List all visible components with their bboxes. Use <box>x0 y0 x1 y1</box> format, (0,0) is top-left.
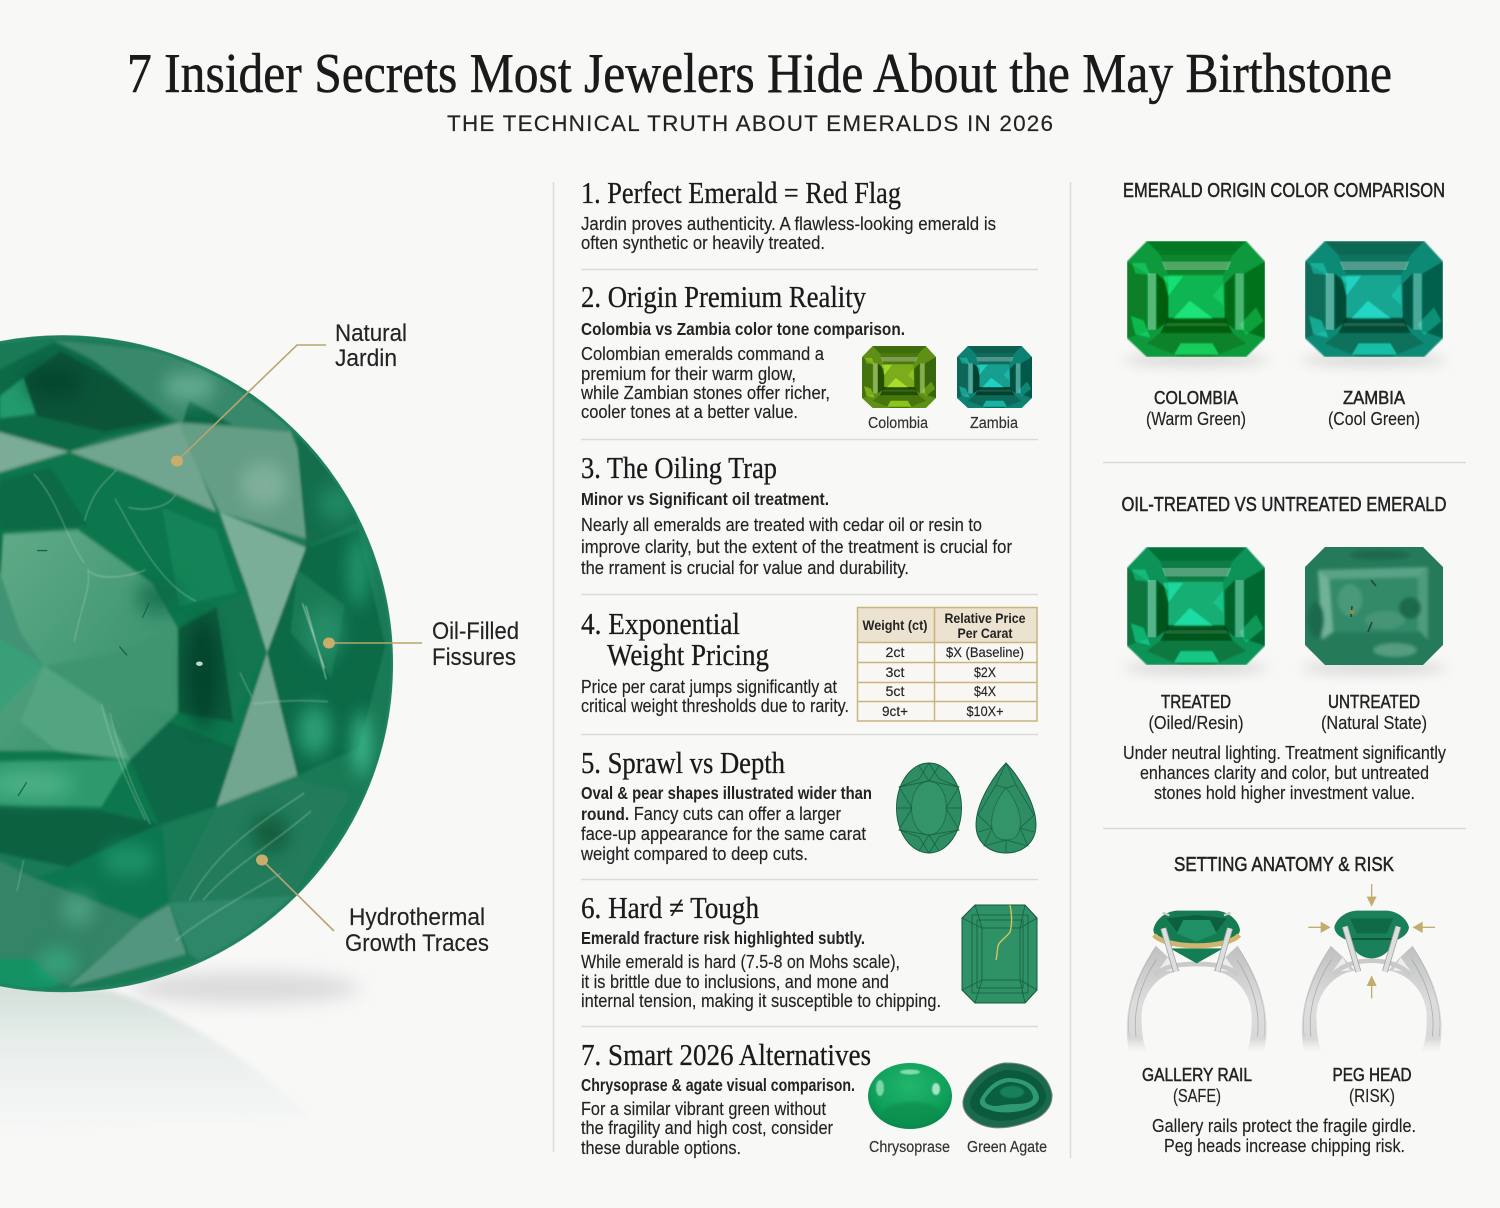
text: setting note: Peg heads increase chipping risk. <box>1164 1135 1405 1156</box>
icon: emerald cut with fracture line <box>962 905 1037 1003</box>
inclusions <box>17 470 328 940</box>
table: relative price per carat: 3ct <box>886 664 905 680</box>
label: peg head <box>1332 1064 1412 1106</box>
text: secret 3 body <box>581 514 1012 578</box>
table: relative price per carat: $2X <box>974 664 997 680</box>
text: secret 2 body: Colombian emeralds command a <box>581 343 825 364</box>
table: relative price per carat: Per Carat <box>958 625 1013 641</box>
caption: Chrysoprase: Chrysoprase <box>869 1139 950 1156</box>
text: secret 6 subhead: Emerald fracture risk highlighted subtly. <box>581 928 865 948</box>
callout: Oil-Filled Fissures <box>323 618 519 671</box>
text: secret 7 body: the fragility and high cost, consider <box>581 1117 833 1138</box>
icon: chrysoprase stone <box>868 1063 952 1129</box>
subtitle: THE TECHNICAL TRUTH ABOUT EMERALDS IN 2026 <box>447 111 1053 136</box>
label: gallery rail: (SAFE) <box>1173 1085 1221 1106</box>
table: relative price per carat: 9ct+ <box>882 703 908 719</box>
text: secret 7 body <box>581 1098 833 1158</box>
text: secret 4 body: critical weight thresholds due to rarity. <box>581 695 849 716</box>
text: secret 5 body: face-up appearance for the same carat <box>581 823 866 844</box>
label: Zambia: (Cool Green) <box>1328 408 1420 429</box>
callout: Oil-Filled Fissures: Oil-Filled <box>432 618 519 645</box>
heading: secret 1: 1. Perfect Emerald = Red Flag <box>581 175 901 210</box>
text: secret 1 body: Jardin proves authenticity. A flawless-looking emerald is <box>581 213 996 234</box>
text: secret 2 body: cooler tones at a better value. <box>581 401 798 422</box>
label: Zambia: ZAMBIA <box>1343 387 1406 408</box>
table: relative price per carat <box>857 607 1037 721</box>
label: treated: TREATED <box>1161 691 1231 712</box>
gem: Zambia <box>1302 241 1446 366</box>
label: treated: (Oiled/Resin) <box>1148 712 1244 733</box>
text: secret 3 body: the rrament is crucial for value and durability. <box>581 557 909 578</box>
hero: large emerald with callouts <box>0 316 519 1135</box>
text: oil treatment note: stones hold higher investment value. <box>1154 782 1415 803</box>
label: treated <box>1148 691 1244 733</box>
table: relative price per carat: Weight (ct) <box>862 617 928 633</box>
text: secret 2 body: while Zambian stones offer richer, <box>580 382 830 403</box>
text: secret 1 body <box>581 213 996 253</box>
icon: peg head ring with stress arrows <box>1302 884 1442 1052</box>
heading: secret 6: 6. Hard ≠ Tough <box>581 890 759 925</box>
text: secret 6 body: While emerald is hard (7.5-8 on Mohs scale), <box>581 951 900 972</box>
text: secret 2 body: premium for their warm glow, <box>581 363 796 384</box>
heading: setting anatomy: SETTING ANATOMY & RISK <box>1174 854 1395 876</box>
text: secret 4 body <box>581 676 849 716</box>
icon: large round emerald <box>0 316 409 1012</box>
caption: Green Agate: Green Agate <box>967 1139 1047 1156</box>
icon: gallery rail ring <box>1127 911 1267 1052</box>
panel: secret 6 <box>581 890 1037 1011</box>
caption: Colombia: Colombia <box>868 415 928 432</box>
text: setting note <box>1152 1115 1416 1156</box>
text: secret 5 body: Oval & pear shapes illustrated wider than <box>581 783 872 803</box>
table: relative price per carat: 2ct <box>886 644 905 660</box>
text: secret 7 body: For a similar vibrant green without <box>581 1098 826 1119</box>
text: secret 5 body: weight compared to deep cuts. <box>580 843 808 864</box>
panel: secret 4 <box>581 606 1037 721</box>
panel: oil-treated vs untreated <box>1122 494 1447 803</box>
text: secret 2 subhead: Colombia vs Zambia color tone comparison. <box>581 319 905 339</box>
icon: pear cut diagram <box>976 763 1036 853</box>
text: secret 5 body <box>580 783 872 864</box>
label: untreated: (Natural State) <box>1321 712 1427 733</box>
text: setting note: Gallery rails protect the fragile girdle. <box>1152 1115 1416 1136</box>
label: Colombia <box>1146 387 1246 429</box>
label: peg head: (RISK) <box>1349 1085 1395 1106</box>
table: relative price per carat: 5ct <box>886 683 905 699</box>
panel: secret 1 <box>581 175 996 253</box>
label: untreated <box>1321 691 1427 733</box>
panel: secret 7 <box>581 1037 1052 1158</box>
gem: untreated <box>1302 547 1446 674</box>
gem: Colombia <box>1124 241 1268 366</box>
text: secret 1 body: often synthetic or heavily treated. <box>581 232 825 253</box>
label: Zambia <box>1328 387 1420 429</box>
icon: oval cut diagram <box>896 763 962 853</box>
callout: Natural Jardin <box>171 320 407 466</box>
panel: setting anatomy and risk <box>1127 854 1442 1156</box>
text: secret 3 subhead: Minor vs Significant oil treatment. <box>581 489 829 509</box>
callout: Natural Jardin: Jardin <box>335 345 397 372</box>
heading: secret 5: 5. Sprawl vs Depth <box>581 745 785 780</box>
heading: secret 4 <box>581 606 769 672</box>
text: secret 3 body: improve clarity, but the extent of the treatment is crucial for <box>581 536 1012 557</box>
heading: secret 4: Weight Pricing <box>607 637 769 672</box>
heading: secret 7: 7. Smart 2026 Alternatives <box>581 1037 871 1072</box>
heading: secret 3: 3. The Oiling Trap <box>581 450 777 485</box>
caption: Zambia: Zambia <box>970 415 1018 432</box>
text: secret 6 body <box>581 951 941 1011</box>
emerald floor shadow and reflection <box>0 972 360 1135</box>
text: secret 6 body: internal tension, making it susceptible to chipping. <box>581 990 941 1011</box>
soft internal reflections <box>0 367 372 974</box>
text: oil treatment note: enhances clarity and color, but untreated <box>1140 762 1429 783</box>
text: secret 6 body: it is brittle due to inclusions, and mone and <box>581 971 889 992</box>
text: oil treatment note: Under neutral lighting. Treatment significantly <box>1123 742 1447 763</box>
table: relative price per carat: $10X+ <box>966 703 1004 719</box>
panel: secret 2 <box>580 279 1032 432</box>
icon: green agate slice <box>963 1063 1052 1128</box>
icon: Zambia small gem <box>957 346 1032 408</box>
label: untreated: UNTREATED <box>1328 691 1420 712</box>
text: secret 5 body: round. Fancy cuts can offer a larger <box>581 803 841 824</box>
callout: Hydrothermal Growth Traces: Hydrothermal <box>349 904 485 931</box>
text: secret 7 body: these durable options. <box>581 1137 741 1158</box>
table: relative price per carat: $4X <box>974 683 997 699</box>
text: oil treatment note <box>1123 742 1447 803</box>
label: gallery rail <box>1142 1064 1252 1106</box>
callout: Oil-Filled Fissures: Fissures <box>432 644 516 671</box>
heading: secret 4: 4. Exponential <box>581 606 740 641</box>
callout: Natural Jardin: Natural <box>335 320 407 347</box>
text: secret 2 body <box>580 343 830 422</box>
table: relative price per carat: $X (Baseline) <box>946 644 1024 660</box>
panel: secret 3 <box>581 450 1012 578</box>
panel: origin color comparison <box>1123 180 1446 429</box>
text: secret 3 body: Nearly all emeralds are treated with cedar oil or resin to <box>581 514 982 535</box>
table: relative price per carat: Relative Price <box>944 610 1026 626</box>
label: gallery rail: GALLERY RAIL <box>1142 1064 1252 1085</box>
callout: Hydrothermal Growth Traces: Growth Traces <box>345 930 489 957</box>
label: Colombia: COLOMBIA <box>1154 387 1239 408</box>
text: secret 4 body: Price per carat jumps significantly at <box>581 676 837 697</box>
icon: Colombia small gem <box>862 346 936 408</box>
label: peg head: PEG HEAD <box>1332 1064 1412 1085</box>
label: Colombia: (Warm Green) <box>1146 408 1246 429</box>
text: secret 7 subhead: Chrysoprase & agate visual comparison. <box>581 1075 855 1095</box>
callout: Hydrothermal Growth Traces <box>256 854 489 957</box>
heading: secret 2: 2. Origin Premium Reality <box>581 279 866 314</box>
gem: treated <box>1124 547 1268 674</box>
panel: secret 5 <box>580 745 1036 864</box>
